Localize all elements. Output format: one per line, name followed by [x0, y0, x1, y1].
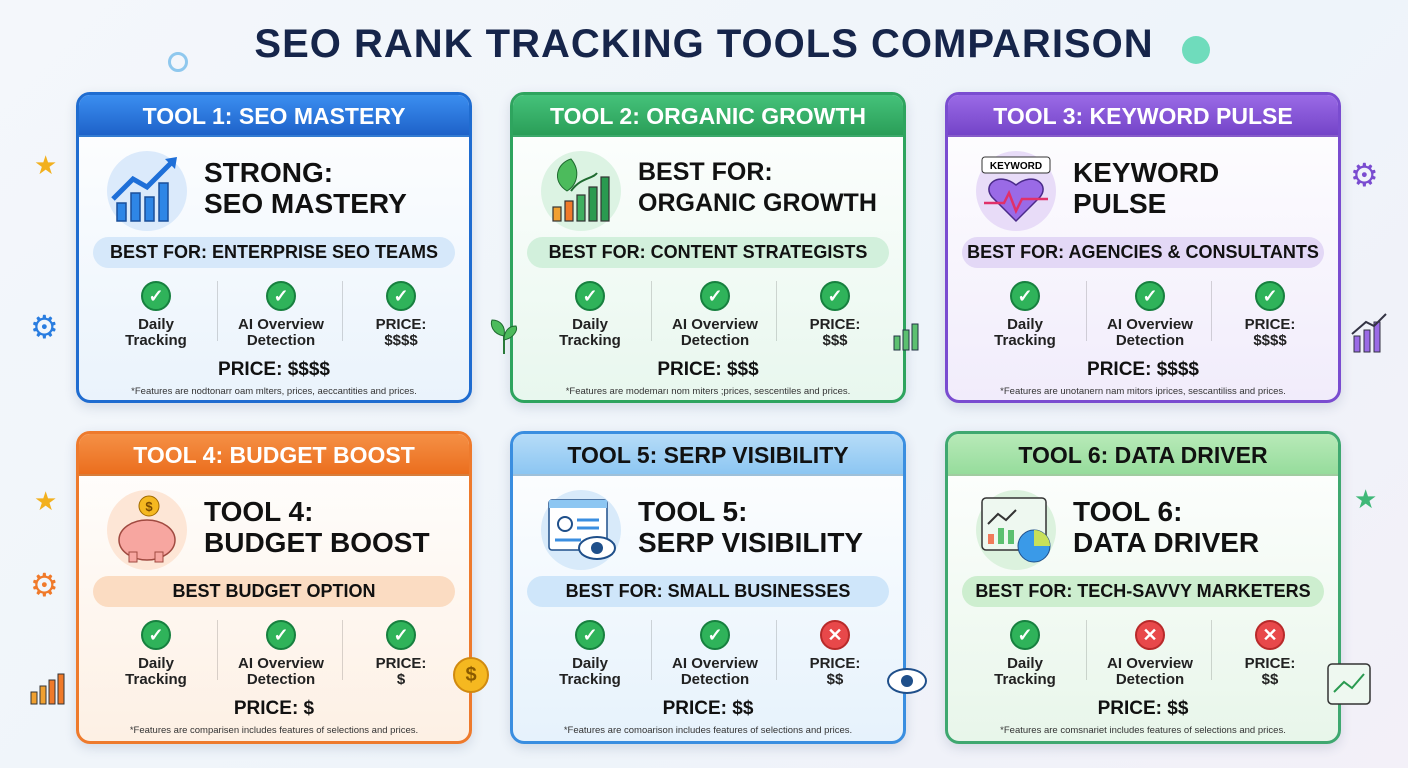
- panel: tool 3: ✓: [1262, 286, 1278, 306]
- icon: keyword heart: [976, 151, 1056, 231]
- tool name: TOOL 6:: [1073, 496, 1182, 527]
- panel: tool 1: [76, 92, 472, 403]
- panel: tool 5: Tracking: [559, 671, 621, 688]
- tool name: STRONG:: [204, 157, 333, 188]
- panel: tool 1: ✓: [273, 286, 289, 306]
- panel: tool 4: [76, 431, 472, 744]
- panel: tool 3: Detection: [1116, 332, 1184, 349]
- panel: tool 1: $$$$: [384, 332, 418, 349]
- tool name: BEST FOR:: [638, 158, 773, 186]
- price: PRICE: $$$$: [1087, 359, 1199, 380]
- panel: tool 3: $$$$: [1253, 332, 1287, 349]
- panel: tool 4: $: [397, 671, 405, 688]
- decoration: side icons: ⚙: [1350, 157, 1379, 193]
- feature columns: [559, 620, 860, 688]
- panel: tool 1: AI Overview: [238, 316, 324, 333]
- header: [79, 95, 469, 137]
- icon: keyword heart: KEYWORD: [990, 161, 1042, 172]
- panel: tool 2: ✓: [582, 286, 598, 306]
- header: TOOL 3: KEYWORD PULSE: [993, 103, 1293, 129]
- panel: tool 4: ✓: [393, 625, 409, 645]
- best for pill: [527, 237, 889, 268]
- panel: tool 4: Daily: [138, 655, 174, 672]
- panel: tool 2: PRICE:: [810, 316, 860, 333]
- tool name: [1073, 157, 1219, 219]
- icon: piggy bank: [107, 490, 187, 570]
- footnote: *Features are comparisen includes features of selections and prices.: [130, 725, 418, 736]
- tool name: [638, 496, 863, 558]
- panel: tool 2: [510, 92, 906, 403]
- best for pill: [962, 237, 1324, 268]
- header: [948, 434, 1338, 476]
- header: [513, 95, 903, 137]
- footnote: *Features are unotanern nam mitors iprices, sescantiliss and prices.: [1000, 386, 1286, 397]
- panel: tool 1: Daily: [138, 316, 174, 333]
- panel: tool 4: Tracking: [125, 671, 187, 688]
- panel: tool 5: $$: [827, 671, 843, 688]
- tool name: [1073, 496, 1259, 558]
- panel: tool 4: PRICE:: [376, 655, 426, 672]
- decoration: side icons: ⚙: [30, 309, 59, 345]
- header: TOOL 2: ORGANIC GROWTH: [550, 103, 866, 129]
- tool name: [204, 496, 430, 558]
- panel: tool 5: Daily: [572, 655, 608, 672]
- tool name: [638, 158, 877, 217]
- panel: tool 2: Daily: [572, 316, 608, 333]
- price: PRICE: $$$$: [218, 359, 330, 380]
- panel: tool 4: Detection: [247, 671, 315, 688]
- decoration: side icons: $: [465, 664, 477, 686]
- feature columns: [994, 281, 1295, 349]
- tool name: TOOL 5:: [638, 496, 747, 527]
- panel: tool 5: AI Overview: [672, 655, 758, 672]
- tool name: SEO MASTERY: [204, 188, 407, 219]
- panel: tool 5: PRICE:: [810, 655, 860, 672]
- panel: tool 6: $$: [1262, 671, 1278, 688]
- decoration: side icons: ★: [34, 486, 57, 516]
- panel: tool 3: AI Overview: [1107, 316, 1193, 333]
- panel: tool 3: Daily: [1007, 316, 1043, 333]
- best for pill: [527, 576, 889, 607]
- icon: serp eye: [541, 490, 621, 570]
- panel: tool 4: ✓: [148, 625, 164, 645]
- panel: tool 2: AI Overview: [672, 316, 758, 333]
- header: TOOL 1: SEO MASTERY: [143, 103, 405, 129]
- decoration: side icons: ⚙: [30, 567, 59, 603]
- feature columns: [994, 620, 1295, 688]
- panel: tool 5: ✓: [582, 625, 598, 645]
- panel: tool 3: ✓: [1142, 286, 1158, 306]
- tool name: PULSE: [1073, 188, 1166, 219]
- panel: tool 3: Tracking: [994, 332, 1056, 349]
- panel: tool 2: Tracking: [559, 332, 621, 349]
- panel: tool 1: ✓: [148, 286, 164, 306]
- tool name: SERP VISIBILITY: [638, 527, 863, 558]
- tool name: TOOL 4:: [204, 496, 313, 527]
- panel: tool 1: PRICE:: [376, 316, 426, 333]
- panel: tool 1: ✓: [393, 286, 409, 306]
- footnote: *Features are comoarison includes features of selections and prices.: [564, 725, 852, 736]
- icon: leaf chart: [541, 151, 621, 231]
- title: SEO RANK TRACKING TOOLS COMPARISON: [254, 22, 1154, 66]
- best for pill: BEST FOR: AGENCIES & CONSULTANTS: [967, 242, 1319, 262]
- panel: tool 2: $$$: [822, 332, 848, 349]
- panel: tool 2: Detection: [681, 332, 749, 349]
- best for pill: [93, 576, 455, 607]
- header: TOOL 6: DATA DRIVER: [1018, 442, 1268, 468]
- panel: tool 6: ✓: [1017, 625, 1033, 645]
- panel: tool 2: ✓: [827, 286, 843, 306]
- price: PRICE: $$: [663, 698, 753, 719]
- header: TOOL 4: BUDGET BOOST: [133, 442, 415, 468]
- panel: tool 6: [945, 431, 1341, 744]
- icon: growth chart: [107, 151, 187, 231]
- decoration: side icons: ★: [34, 150, 57, 180]
- header: TOOL 5: SERP VISIBILITY: [567, 442, 849, 468]
- footnote: *Features are nodtonarr oam mlters, prices, aeccantities and prices.: [131, 386, 417, 397]
- panel: tool 6: ✕: [1142, 625, 1158, 645]
- panel: tool 3: ✓: [1017, 286, 1033, 306]
- header: [948, 95, 1338, 137]
- tool name: [204, 157, 407, 219]
- best for pill: [962, 576, 1324, 607]
- panel: tool 6: Daily: [1007, 655, 1043, 672]
- price: PRICE: $$$: [657, 359, 759, 380]
- panel: tool 6: Tracking: [994, 671, 1056, 688]
- panel: tool 6: AI Overview: [1107, 655, 1193, 672]
- decoration: side icons: ★: [1354, 484, 1377, 514]
- header: [79, 434, 469, 476]
- price: PRICE: $$: [1098, 698, 1188, 719]
- tool name: KEYWORD: [1073, 157, 1219, 188]
- panel: tool 2: ✓: [707, 286, 723, 306]
- panel: tool 4: ✓: [273, 625, 289, 645]
- tool name: BUDGET BOOST: [204, 527, 430, 558]
- panel: tool 5: ✓: [707, 625, 723, 645]
- best for pill: BEST FOR: CONTENT STRATEGISTS: [549, 242, 867, 262]
- best for pill: BEST FOR: SMALL BUSINESSES: [566, 581, 850, 601]
- feature columns: [125, 281, 426, 349]
- feature columns: [125, 620, 426, 688]
- panel: tool 4: AI Overview: [238, 655, 324, 672]
- best for pill: BEST BUDGET OPTION: [172, 581, 376, 601]
- panel: tool 6: Detection: [1116, 671, 1184, 688]
- footnote: *Features are comsnariet includes features of selections and prices.: [1000, 725, 1286, 736]
- panel: tool 5: [510, 431, 906, 744]
- tool name: DATA DRIVER: [1073, 527, 1259, 558]
- panel: tool 6: PRICE:: [1245, 655, 1295, 672]
- feature columns: [559, 281, 860, 349]
- panel: tool 3: PRICE:: [1245, 316, 1295, 333]
- best for pill: BEST FOR: ENTERPRISE SEO TEAMS: [110, 242, 438, 262]
- panel: tool 6: ✕: [1262, 625, 1278, 645]
- footnote: *Features are modemarı nom miters ;prices, sescentiles and prices.: [566, 386, 850, 397]
- panel: tool 5: Detection: [681, 671, 749, 688]
- header: [513, 434, 903, 476]
- panel: tool 1: Tracking: [125, 332, 187, 349]
- tool name: ORGANIC GROWTH: [638, 189, 877, 217]
- icon: piggy bank: $: [145, 499, 153, 514]
- panel: tool 3: [945, 92, 1341, 403]
- best for pill: [93, 237, 455, 268]
- best for pill: BEST FOR: TECH-SAVVY MARKETERS: [975, 581, 1311, 601]
- price: PRICE: $: [234, 698, 314, 719]
- icon: dashboard: [976, 490, 1056, 570]
- panel: tool 1: Detection: [247, 332, 315, 349]
- panel: tool 5: ✕: [827, 625, 843, 645]
